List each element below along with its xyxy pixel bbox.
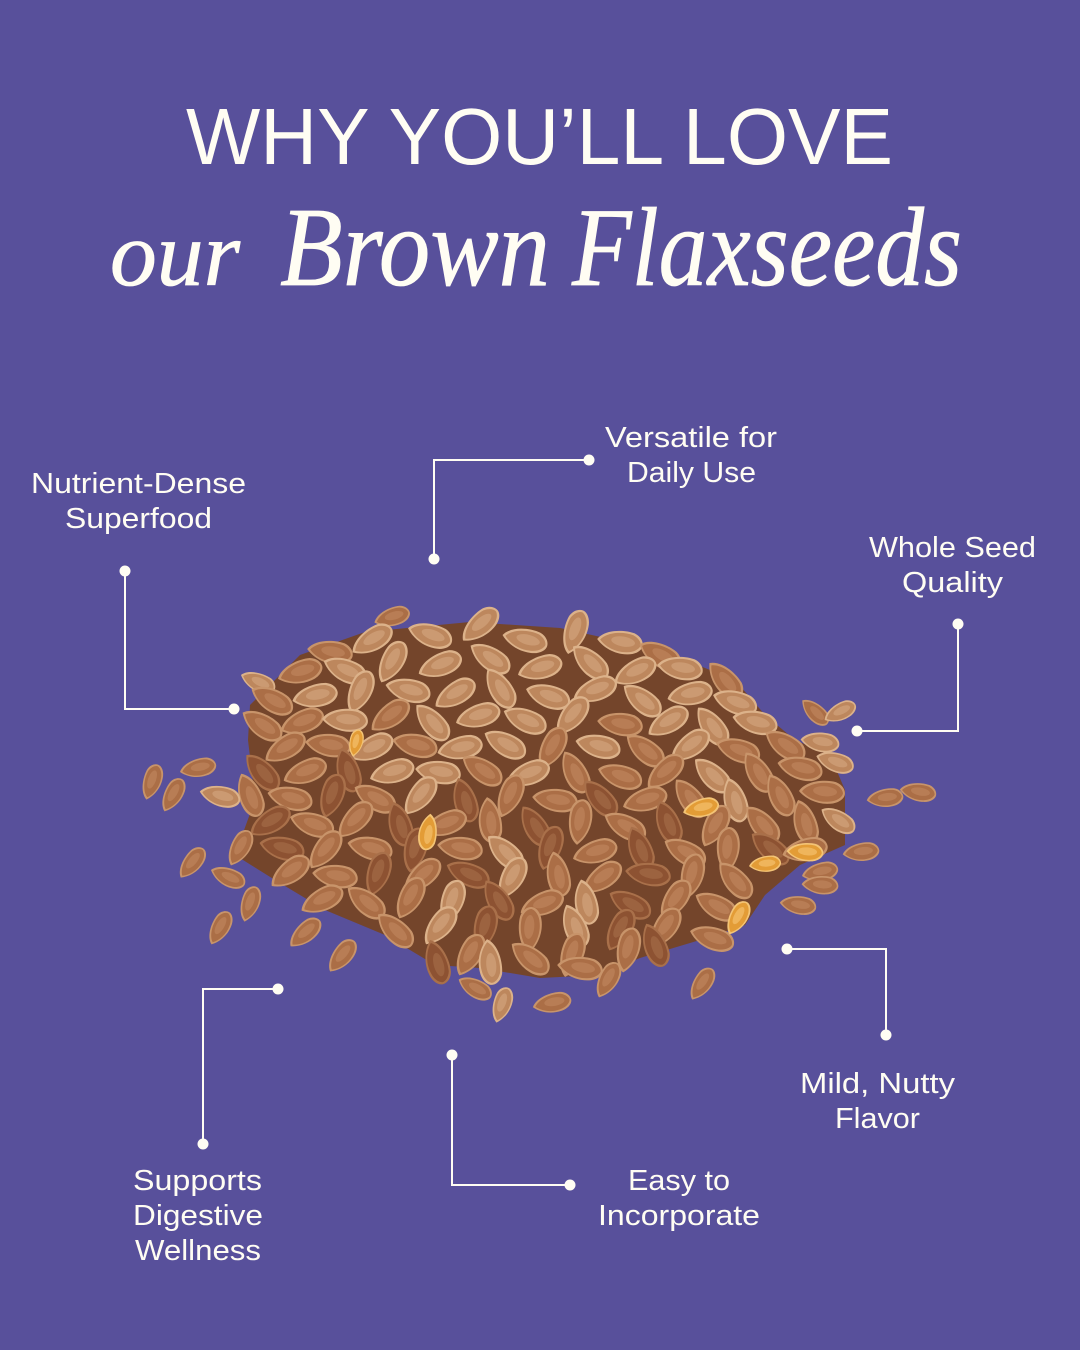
label: Nutrient xyxy=(31,468,246,535)
label: Versatile: Daily Use xyxy=(627,457,756,489)
label: Whole Seed xyxy=(869,532,1036,599)
callout: Whole Seed Quality xyxy=(852,532,1036,736)
script subtitle: Flaxseeds xyxy=(571,186,962,310)
callout: Supports Digestive Wellness xyxy=(133,984,284,1267)
connector: Versatile xyxy=(428,454,594,564)
label: Whole Seed: Whole Seed xyxy=(869,532,1036,564)
title: WHY YOU’LL LOVE xyxy=(186,92,893,181)
flaxseed pile image xyxy=(137,601,938,1025)
callout: Nutrient-Dense Superfood xyxy=(31,468,246,714)
script subtitle: Brown xyxy=(280,186,550,310)
callout: Easy to Incorporate xyxy=(446,1050,760,1232)
label: Mild xyxy=(800,1068,956,1135)
script subtitle: our xyxy=(110,203,241,305)
label: Easy: Easy to xyxy=(628,1165,730,1197)
label: Supports: Wellness xyxy=(135,1235,261,1267)
connector: Mild xyxy=(782,944,892,1040)
label: Versatile xyxy=(605,422,777,489)
label: Easy xyxy=(598,1165,760,1232)
label: Supports xyxy=(133,1165,263,1267)
label: Easy: Incorporate xyxy=(598,1200,760,1232)
callout: Versatile for Daily Use xyxy=(428,422,777,564)
label: Whole Seed: Quality xyxy=(902,567,1004,599)
label: Nutrient: Nutrient-Dense xyxy=(31,468,246,500)
label: Mild: Flavor xyxy=(835,1103,920,1135)
connector: Supports xyxy=(198,984,284,1150)
label: Supports: Supports xyxy=(133,1165,262,1197)
connector: Nutrient xyxy=(120,566,240,714)
script subtitle xyxy=(110,186,962,310)
label: Versatile: Versatile for xyxy=(605,422,777,454)
label: Mild: Mild, Nutty xyxy=(800,1068,956,1100)
label: Supports: Digestive xyxy=(133,1200,263,1232)
label: Nutrient: Superfood xyxy=(65,503,212,535)
connector: Whole Seed xyxy=(852,618,964,736)
connector: Easy xyxy=(446,1050,576,1190)
callout: Mild, Nutty Flavor xyxy=(782,944,956,1135)
